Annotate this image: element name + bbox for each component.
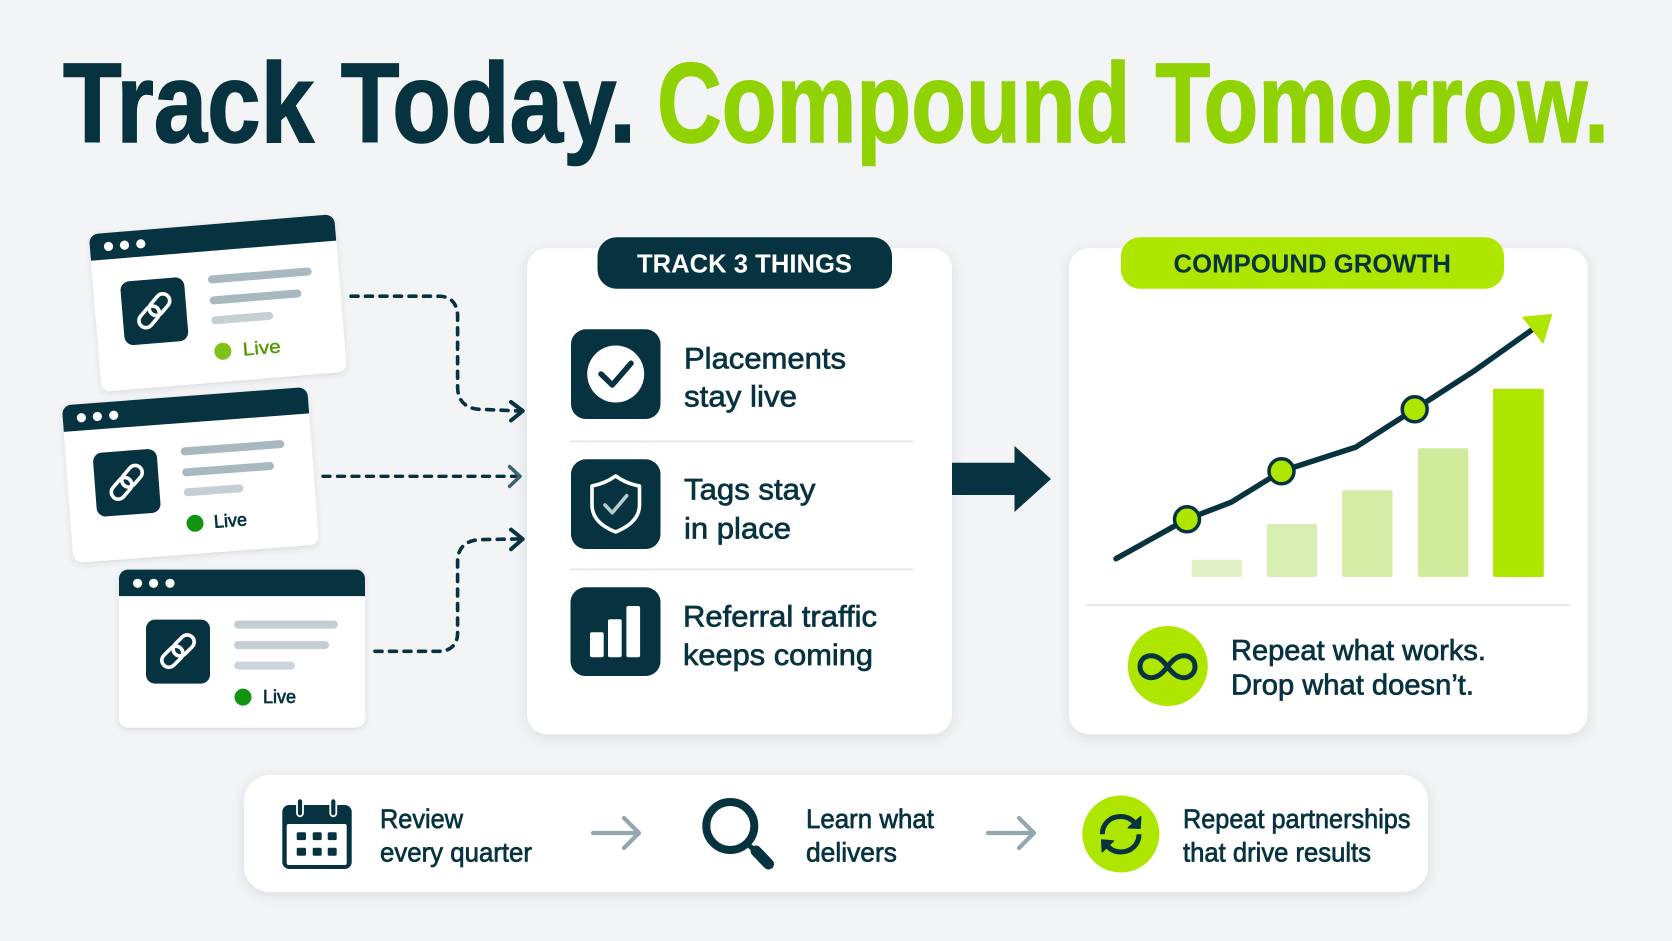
text: review every quarter: Review xyxy=(380,804,463,834)
icon: shield xyxy=(571,459,660,549)
arrow: step 1 to 2 xyxy=(593,818,639,848)
text: tags stay in place xyxy=(684,473,816,545)
icon: repeat xyxy=(1082,796,1159,872)
heading pill: track 3 things: TRACK 3 THINGS xyxy=(637,249,852,279)
card: live placement 2: Live xyxy=(213,509,248,532)
text: repeat partnerships: that drive results xyxy=(1183,838,1371,868)
card: live placement 3: Live xyxy=(263,687,296,707)
text: repeat partnerships xyxy=(1183,804,1410,868)
text: learn what delivers xyxy=(806,804,934,868)
title: Track Today. xyxy=(63,40,636,166)
text: repeat what works: Repeat what works. xyxy=(1231,635,1486,667)
panel: track 3 things xyxy=(527,237,952,734)
text: tags stay in place: in place xyxy=(684,512,791,545)
arrow: main flow xyxy=(952,446,1051,512)
text: placements stay live: stay live xyxy=(684,381,797,414)
icon: infinity xyxy=(1128,626,1208,706)
text: repeat what works xyxy=(1231,635,1486,702)
text: repeat partnerships: Repeat partnerships xyxy=(1183,804,1410,834)
card: live placement 2 xyxy=(62,387,319,563)
text: referral traffic keeps coming xyxy=(683,601,877,672)
text: placements stay live xyxy=(684,342,846,414)
text: review every quarter: every quarter xyxy=(380,838,532,868)
icon: magnifier xyxy=(706,802,768,864)
text: review every quarter xyxy=(380,804,532,868)
text: referral traffic keeps coming: keeps coming xyxy=(683,639,873,672)
icon: calendar xyxy=(282,798,352,869)
text: referral traffic keeps coming: Referral traffic xyxy=(683,601,877,634)
text: repeat what works: Drop what doesn’t. xyxy=(1231,670,1474,702)
heading pill: track 3 things xyxy=(598,237,892,289)
heading pill: compound growth xyxy=(1121,237,1504,289)
bar chart xyxy=(1192,389,1544,577)
text: placements stay live: Placements xyxy=(684,342,846,375)
icon: check xyxy=(571,329,660,419)
icon: bars xyxy=(570,587,660,676)
arrow: dashed connector 2 xyxy=(323,467,520,486)
arrow: dashed connector 1 xyxy=(351,296,523,420)
card: live placement 3 xyxy=(119,570,365,728)
arrow: step 2 to 3 xyxy=(988,818,1034,848)
card: live placement 1 xyxy=(89,214,347,392)
card: live placement 1: Live xyxy=(242,336,281,360)
panel: compound growth xyxy=(1069,237,1588,734)
text: learn what delivers: Learn what xyxy=(806,804,934,834)
text: tags stay in place: Tags stay xyxy=(684,473,816,506)
panel: live placement cards xyxy=(62,214,365,728)
text: learn what delivers: delivers xyxy=(806,838,897,868)
title xyxy=(63,40,1609,166)
line chart with arrow xyxy=(1116,315,1551,559)
panel: review loop xyxy=(244,775,1428,892)
arrow: dashed connector 3 xyxy=(375,530,523,651)
heading pill: compound growth: COMPOUND GROWTH xyxy=(1174,249,1451,279)
